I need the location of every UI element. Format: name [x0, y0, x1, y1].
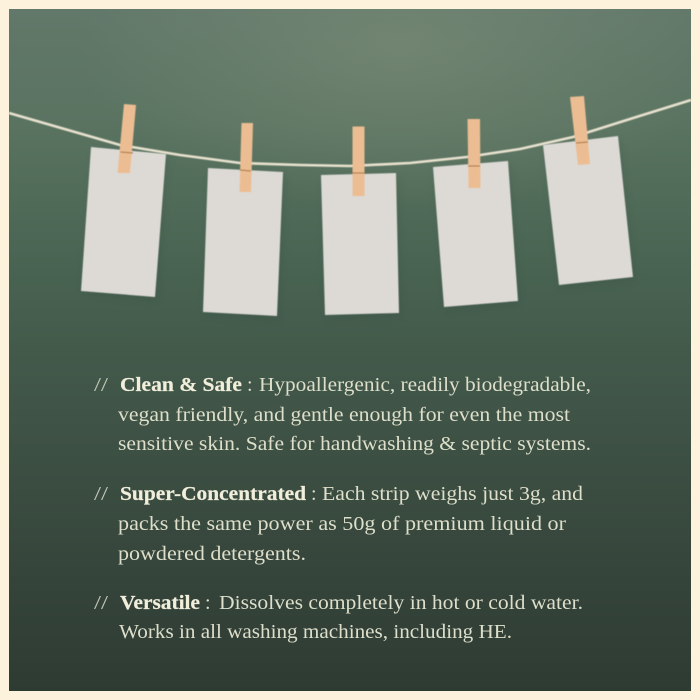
text block: Clean & Safe: vegan friendly, and gentle enough for even the most: [118, 404, 570, 426]
text block: Clean & Safe: [94, 374, 591, 455]
strip 5: [543, 136, 633, 285]
twine rope: [9, 100, 691, 166]
text block: Clean & Safe: sensitive skin. Safe for handwashing & septic systems.: [118, 433, 591, 455]
text block: Versatile: [94, 592, 583, 643]
text block: Clean & Safe: :: [247, 374, 253, 396]
strip 4: [433, 161, 518, 307]
panel: hanging strips on a line: [9, 96, 691, 320]
strip 1: [81, 147, 166, 297]
text block: Versatile: Dissolves completely in hot or cold water.: [219, 592, 583, 614]
text block: Versatile: //: [94, 592, 109, 614]
text block: Super-Concentrated: powdered detergents.: [118, 543, 306, 565]
strip shadows: [83, 140, 635, 320]
text block: Super-Concentrated: Each strip weighs just 3g, and: [322, 483, 583, 505]
clothespin 1: [118, 104, 136, 173]
clothespin 2: [240, 123, 253, 192]
text block: Super-Concentrated: packs the same power as 50g of premium liquid or: [118, 513, 566, 535]
clothespin 5: [570, 96, 590, 165]
text block: Super-Concentrated: //: [94, 483, 109, 505]
text block: Versatile: Works in all washing machines, including HE.: [119, 621, 512, 643]
clothespin 3: [352, 126, 365, 196]
text block: Versatile: Versatile: [120, 592, 200, 614]
text block: Clean & Safe: //: [94, 374, 109, 396]
text block: Super-Concentrated: [94, 483, 583, 565]
text block: Versatile: :: [205, 592, 211, 614]
text block: Clean & Safe: Clean & Safe: [120, 374, 242, 396]
text block: Super-Concentrated: :: [311, 483, 317, 505]
text block: Clean & Safe: Hypoallergenic, readily biodegradable,: [259, 374, 591, 396]
strip 3: [321, 173, 399, 315]
clothespin 4: [468, 119, 480, 188]
text block: Super-Concentrated: Super-Concentrated: [120, 483, 306, 505]
strip 2: [203, 168, 283, 316]
